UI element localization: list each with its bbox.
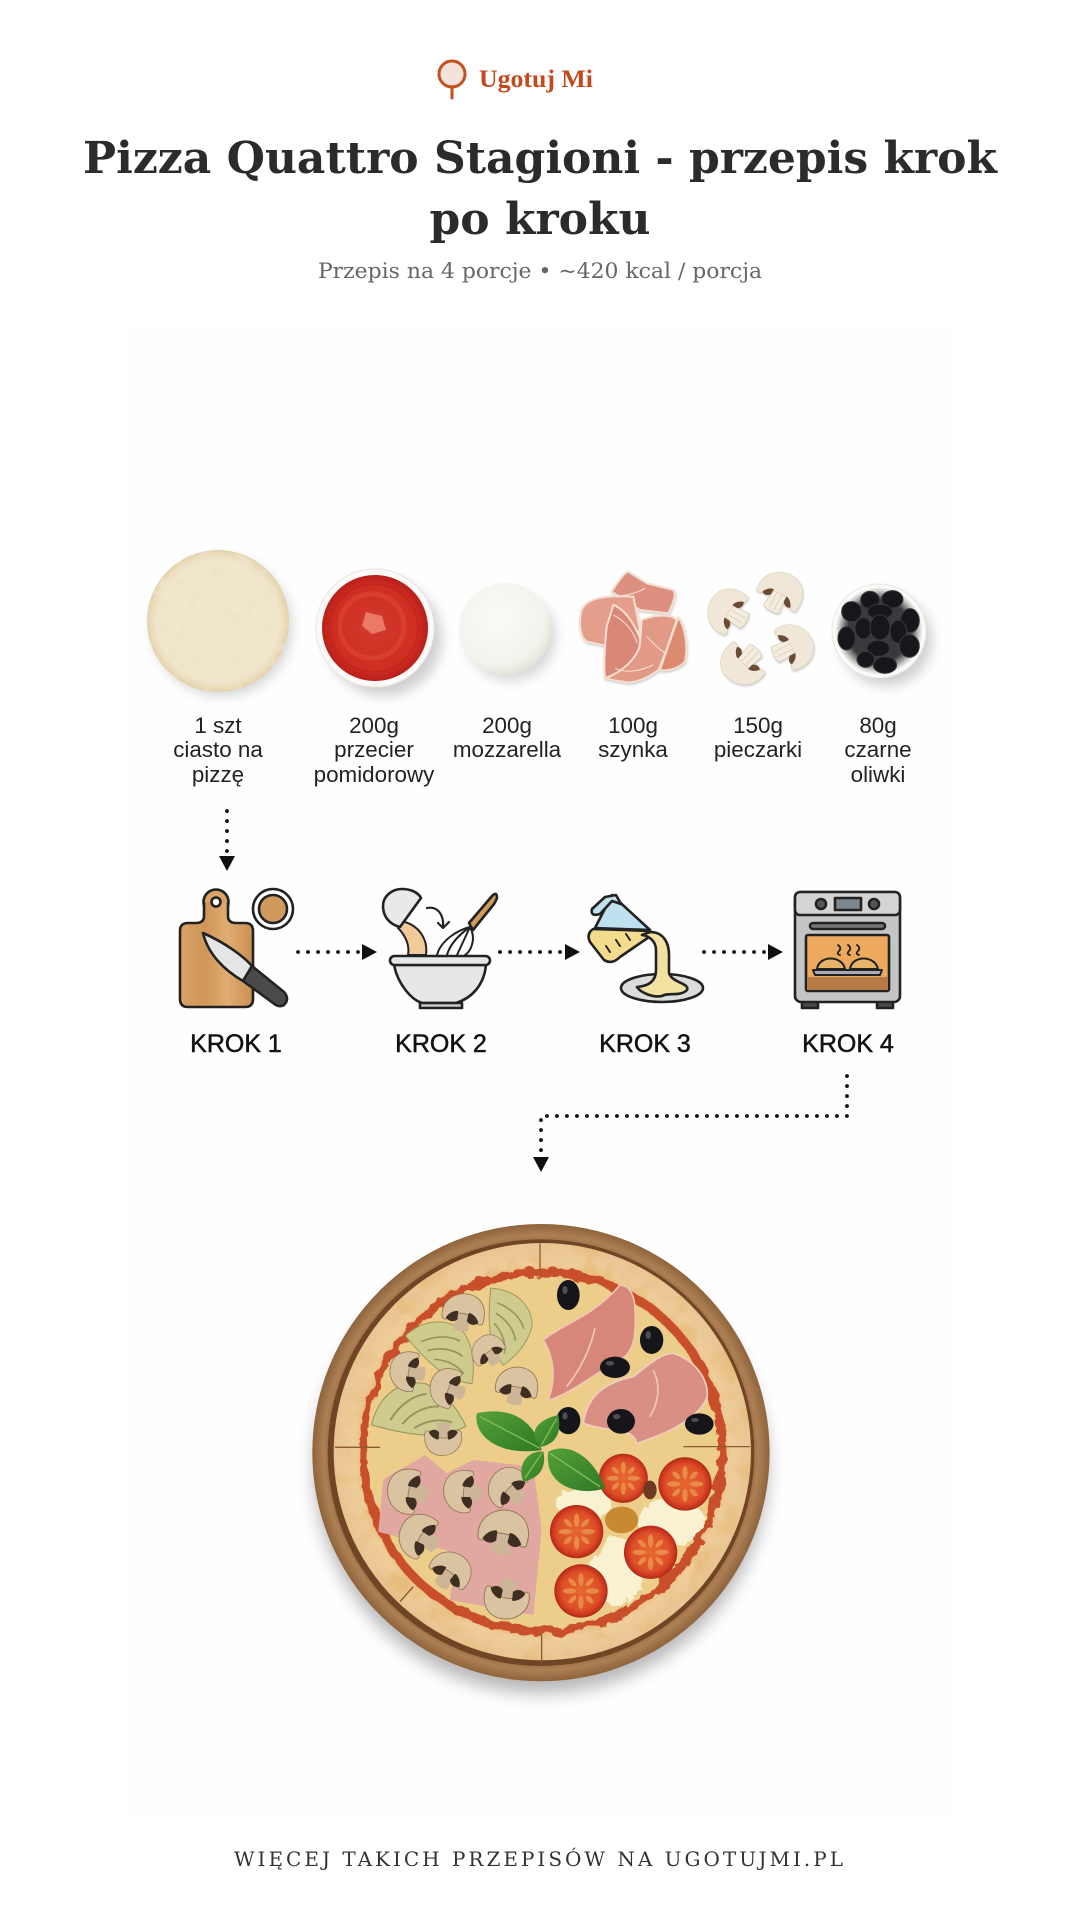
title: po kroku: [430, 194, 650, 245]
step 4: oven: [795, 892, 900, 1008]
logo wordmark: Ugotuj Mi: [479, 64, 593, 93]
ingredient: mushrooms: [699, 563, 821, 695]
label: mushrooms: 150g: [733, 713, 783, 738]
quarter: prosciutto and olives: [543, 1280, 714, 1443]
ingredient: pizza dough: [147, 550, 292, 696]
sauce: [358, 1268, 726, 1636]
arrow: step 1 to 2: [298, 944, 377, 960]
label: olives: czarne: [844, 737, 912, 762]
label: tomato passata: 200g: [349, 713, 399, 738]
step 3: measuring jug pouring onto plate: [589, 895, 703, 1002]
ingredient: black olives bowl: [832, 584, 932, 686]
title: Pizza Quattro Stagioni - przepis krok: [83, 133, 998, 184]
label: KROK 3: KROK 3: [599, 1030, 691, 1058]
wooden board: [312, 1224, 770, 1681]
label: KROK 1: KROK 1: [190, 1030, 282, 1058]
label: KROK 4: KROK 4: [802, 1030, 894, 1058]
arrow: step 4 to finished pizza: [533, 1076, 847, 1172]
label: ham: 100g: [608, 713, 658, 738]
label: olives: 80g: [859, 713, 897, 738]
label: tomato passata: przecier: [334, 737, 414, 762]
label: tomato passata: pomidorowy: [314, 762, 435, 787]
ingredient: tomato passata bowl: [316, 569, 442, 696]
label: dough: 1 szt: [194, 713, 242, 738]
label: mozzarella: 200g: [482, 713, 532, 738]
subtitle: Przepis na 4 porcje • ~420 kcal / porcja: [318, 259, 762, 284]
ingredient: mozzarella ball: [459, 583, 556, 681]
step 2: mixing bowl with whisk: [383, 889, 497, 1008]
finished pizza on wooden board: [312, 1224, 770, 1693]
panel: ingredients: [147, 550, 932, 787]
footer call to action: WIĘCEJ TAKICH PRZEPISÓW NA UGOTUJMI.PL: [234, 1846, 846, 1871]
arrow: ingredients to step 1: [219, 811, 235, 871]
logo: Ugotuj Mi: [439, 61, 593, 98]
label: olives: oliwki: [851, 762, 905, 787]
label: KROK 2: KROK 2: [395, 1030, 487, 1058]
label: ham: szynka: [598, 737, 668, 762]
arrow: step 2 to 3: [500, 944, 580, 960]
basil leaves: [476, 1411, 605, 1491]
slice cuts: [335, 1243, 750, 1663]
label: mushrooms: pieczarki: [714, 737, 802, 762]
cheese: [367, 1277, 717, 1627]
ingredient: prosciutto slices: [580, 572, 686, 682]
crust: [334, 1243, 751, 1660]
quarter: tomatoes and mozzarella: [550, 1454, 712, 1618]
board shadow: [314, 1243, 768, 1693]
quarter: artichokes and mushrooms: [368, 1280, 541, 1456]
label: dough: ciasto na: [173, 737, 263, 762]
arrow: step 3 to 4: [704, 944, 783, 960]
quarter: ham and mushrooms: [378, 1455, 542, 1623]
icon: pizza peel pin: [439, 61, 465, 98]
label: mozzarella: mozzarella: [453, 737, 562, 762]
label: dough: pizzę: [192, 762, 244, 787]
step 1: cutting board and knife: [180, 889, 293, 1007]
